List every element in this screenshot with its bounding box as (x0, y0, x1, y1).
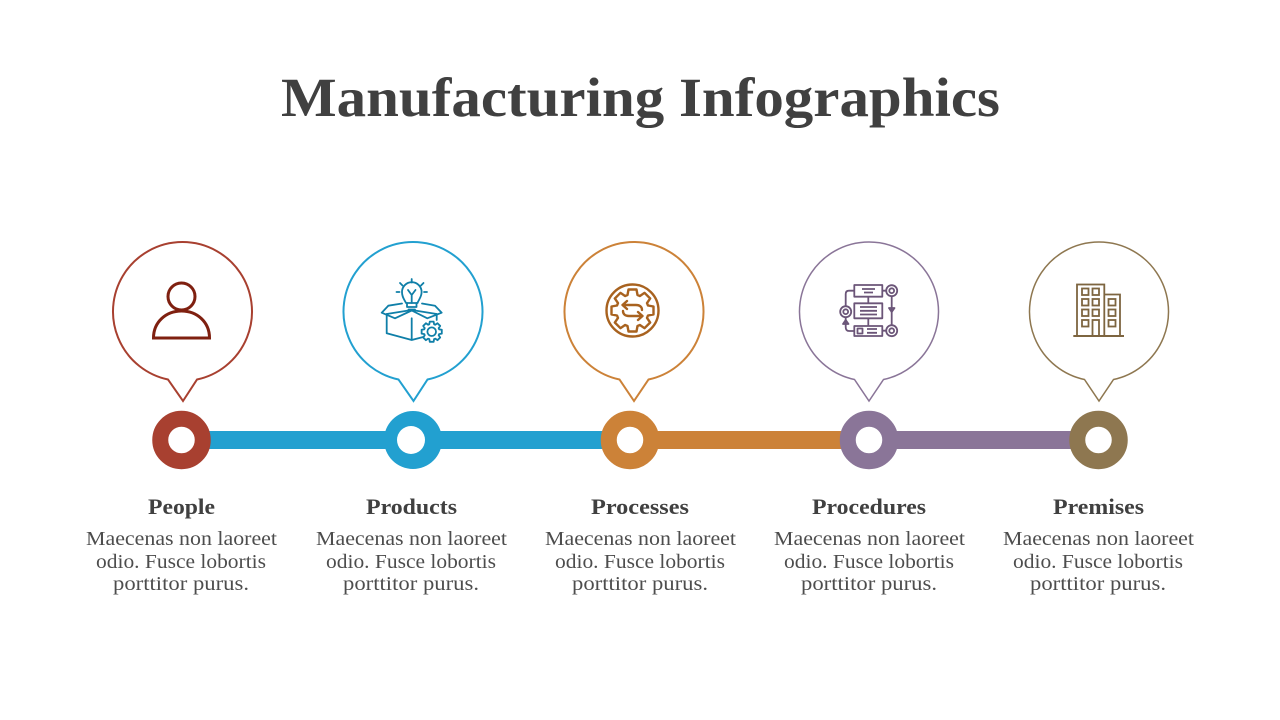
panel: products (316, 242, 507, 595)
heading: people: People (148, 494, 215, 519)
text: processes: odio. Fusce lobortis (555, 551, 725, 573)
text: products: odio. Fusce lobortis (326, 551, 496, 573)
timeline node: procedures (848, 419, 890, 461)
panel: premises (1003, 242, 1194, 595)
icon: gear with cycle arrows (606, 284, 658, 336)
callout pin: premises (1030, 242, 1168, 401)
heading: procedures: Procedures (812, 494, 926, 519)
text: people: odio. Fusce lobortis (96, 551, 266, 573)
text: procedures: porttitor purus. (801, 573, 937, 595)
icon: person (154, 283, 210, 338)
icon: buildings (1073, 284, 1124, 336)
timeline bar (205, 431, 1074, 449)
text: people (86, 528, 277, 595)
text: people: porttitor purus. (113, 573, 249, 595)
icon: process flow diagram (840, 285, 897, 336)
text: premises: odio. Fusce lobortis (1013, 551, 1183, 573)
text: processes: porttitor purus. (572, 573, 708, 595)
text: procedures: Maecenas non laoreet (774, 528, 965, 550)
timeline node: people (160, 419, 203, 461)
text: premises: porttitor purus. (1030, 573, 1166, 595)
timeline node: products (384, 411, 442, 469)
text: premises (1003, 528, 1194, 595)
panel: people (86, 242, 277, 595)
callout pin: people (113, 242, 252, 401)
callout pin: procedures (800, 242, 939, 401)
text: products (316, 528, 507, 595)
text: people: Maecenas non laoreet (86, 528, 277, 550)
heading: processes: Processes (591, 494, 689, 519)
title: Manufacturing Infographics (281, 67, 1000, 128)
icon: box with bulb and gear (382, 279, 442, 342)
panel: processes (545, 242, 736, 595)
heading: products: Products (366, 494, 457, 519)
timeline node: premises (1077, 419, 1120, 461)
text: products: porttitor purus. (343, 573, 479, 595)
timeline node: processes (609, 419, 651, 461)
text: products: Maecenas non laoreet (316, 528, 507, 550)
heading: premises: Premises (1053, 494, 1144, 519)
text: processes (545, 528, 736, 595)
callout pin: products (344, 242, 482, 401)
text: premises: Maecenas non laoreet (1003, 528, 1194, 550)
callout pin: processes (565, 242, 704, 401)
text: procedures (774, 528, 965, 595)
text: procedures: odio. Fusce lobortis (784, 551, 954, 573)
panel: procedures (774, 242, 965, 595)
text: processes: Maecenas non laoreet (545, 528, 736, 550)
